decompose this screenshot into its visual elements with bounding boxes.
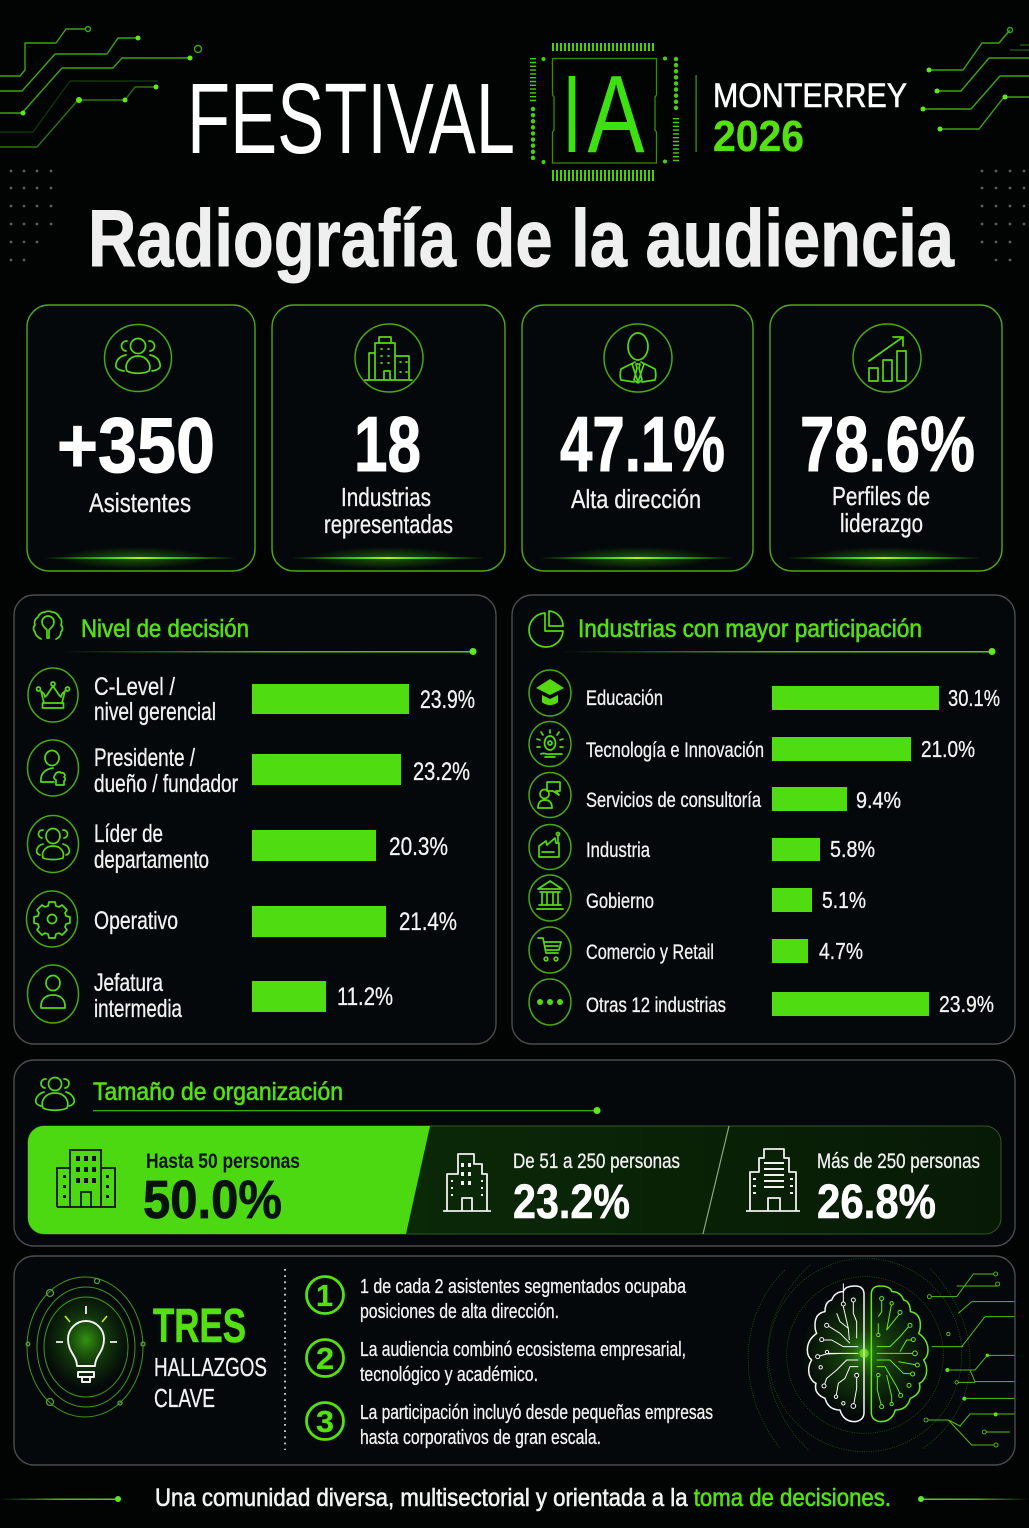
dot grid right — [981, 170, 1025, 261]
label: Perfiles de liderazgo: Perfiles de — [832, 481, 930, 511]
row: Tecnología e Innovación: Tecnología e Innovación — [586, 739, 764, 762]
footer statement: Una comunidad diversa, multisectorial y orientada a la toma de decisiones. — [155, 1484, 891, 1512]
row: Tecnología e Innovación: 21.0% — [921, 736, 975, 762]
row: Educación — [529, 670, 1000, 716]
finding 1: posiciones de alta dirección. — [360, 1301, 559, 1323]
row: C-Level — [28, 668, 475, 726]
icon: people — [104, 324, 172, 392]
stat: 47.1%: 47.1% — [560, 400, 725, 488]
row: Comercio y Retail: Comercio y Retail — [586, 941, 714, 964]
segment: de 51 a 250 personas: 23.2% — [513, 1176, 630, 1229]
heading: HALLAZGOS CLAVE — [154, 1352, 267, 1413]
icon: glowing bulb — [26, 1277, 145, 1417]
row: Comercio y Retail — [529, 927, 863, 973]
stat: 78.6%: 78.6% — [800, 400, 975, 488]
panel: liderazgo — [770, 305, 1002, 571]
stat: +350: +350 — [57, 401, 215, 489]
heading: Industrias con mayor participación: Industrias con mayor participación — [578, 615, 922, 643]
label: Asistentes: Asistentes — [89, 488, 191, 518]
row: Jefatura intermedia: intermedia — [94, 995, 182, 1023]
logo: FESTIVAL wordmark: FESTIVAL — [187, 63, 515, 175]
icon: pie chart — [529, 611, 563, 647]
finding 2: 2 — [316, 1341, 334, 1376]
icon: team — [36, 1078, 74, 1110]
finding 2: tecnológico y académico. — [360, 1364, 538, 1386]
row: Jefatura intermedia: 11.2% — [337, 983, 393, 1011]
panel: tamaño de organización — [14, 1060, 1015, 1246]
row: Otras 12 industrias: 23.9% — [939, 991, 994, 1017]
row: Presidente: 23.2% — [413, 758, 470, 786]
row: Presidente — [28, 740, 470, 798]
row: Gobierno — [529, 875, 866, 921]
row: Servicios de consultoría — [529, 772, 901, 818]
segment: de 51 a 250 personas: De 51 a 250 personas — [513, 1150, 680, 1173]
panel: alta dirección — [522, 305, 753, 571]
logo: IA chip: I — [562, 53, 582, 176]
footer: decorative line right — [918, 1496, 1029, 1502]
row: Jefatura intermedia — [28, 965, 393, 1023]
row: Otras 12 industrias: Otras 12 industrias — [586, 994, 726, 1017]
dotted separator — [284, 1269, 286, 1450]
heading: Nivel de decisión: Nivel de decisión — [81, 615, 249, 643]
panel: asistentes — [27, 305, 255, 571]
finding 2: La audiencia combinó ecosistema empresarial, — [360, 1339, 686, 1361]
row: Presidente: Presidente / — [94, 744, 195, 772]
row: Líder de departamento: 20.3% — [389, 833, 448, 861]
icon: gear bulb — [34, 611, 62, 639]
row: Otras 12 industrias — [529, 979, 994, 1025]
footer: decorative line left — [0, 1496, 121, 1502]
label: Perfiles de liderazgo: liderazgo — [840, 508, 923, 538]
icon: buildings — [355, 324, 423, 392]
finding 1: 1 de cada 2 asistentes segmentados ocupaba — [360, 1276, 687, 1298]
finding 3: 3 — [316, 1404, 334, 1439]
heading: Tamaño de organización: Tamaño de organización — [93, 1078, 343, 1106]
segment: hasta 50 personas: Hasta 50 personas — [146, 1150, 300, 1173]
stat: 18: 18 — [354, 400, 421, 488]
logo: IA chip — [533, 47, 676, 176]
row: Comercio y Retail: 4.7% — [819, 938, 863, 964]
row: Gobierno: 5.1% — [822, 887, 866, 913]
label: Industrias representadas: representadas — [324, 509, 453, 539]
row: Líder de departamento: Líder de — [94, 820, 163, 848]
divider between segments — [703, 1126, 729, 1234]
heading rule — [560, 648, 996, 655]
segmented bar background — [28, 1126, 1001, 1234]
segment: más de 250 personas: Más de 250 personas — [817, 1150, 980, 1173]
circuit decoration: top left — [0, 26, 202, 147]
label: Industrias representadas: Industrias — [341, 482, 431, 512]
row: C-Level: C-Level / — [94, 673, 175, 701]
segment: de 51 a 250 personas — [443, 1150, 680, 1229]
circuit decoration: top right — [920, 28, 1029, 132]
row: Servicios de consultoría: 9.4% — [856, 787, 901, 813]
panel: tres hallazgos clave — [14, 1256, 1015, 1465]
icon: growth chart — [853, 324, 921, 392]
logo: IA chip: A — [588, 53, 645, 176]
icon: executive — [604, 324, 672, 392]
logo: MONTERREY: MONTERREY — [713, 77, 907, 115]
finding 1 — [306, 1276, 687, 1323]
heading rule — [93, 1107, 600, 1114]
row: Industria: 5.8% — [830, 836, 875, 862]
logo divider — [696, 75, 697, 152]
heading: HALLAZGOS CLAVE: HALLAZGOS — [154, 1352, 267, 1382]
row: Tecnología e Innovación — [529, 722, 975, 766]
heading rule — [60, 648, 476, 655]
label: Perfiles de liderazgo — [832, 481, 930, 538]
row: Servicios de consultoría: Servicios de consultoría — [586, 789, 761, 812]
row: Líder de departamento — [28, 816, 448, 874]
finding 2 — [306, 1339, 686, 1386]
row: Líder de departamento: departamento — [94, 846, 209, 874]
row: Operativo: Operativo — [94, 907, 178, 935]
segment: más de 250 personas: 26.8% — [817, 1176, 936, 1229]
label: Industrias representadas — [324, 482, 453, 539]
illustration: circuit brain — [748, 1258, 1014, 1452]
segment: hasta 50 personas — [28, 1126, 430, 1234]
segment: más de 250 personas — [746, 1149, 980, 1229]
row: C-Level: 23.9% — [420, 686, 475, 714]
heading: HALLAZGOS CLAVE: CLAVE — [154, 1383, 215, 1413]
row: C-Level: nivel gerencial — [94, 698, 216, 726]
label: Alta dirección: Alta dirección — [571, 484, 701, 514]
finding 3 — [306, 1402, 713, 1449]
panel: industrias con mayor participación — [512, 595, 1015, 1044]
row: Presidente: dueño / fundador — [94, 770, 238, 798]
panel: industrias — [272, 305, 505, 571]
logo: 2026: 2026 — [713, 112, 804, 161]
finding 3: La participación incluyó desde pequeñas empresas — [360, 1402, 713, 1424]
row: Industria: Industria — [586, 839, 650, 862]
panel: nivel de decisión — [14, 595, 496, 1044]
finding 3: hasta corporativos de gran escala. — [360, 1427, 601, 1449]
segment: hasta 50 personas: 50.0% — [143, 1170, 282, 1230]
heading: TRES: TRES — [153, 1300, 246, 1353]
row: Educación: Educación — [586, 687, 663, 710]
row: Educación: 30.1% — [948, 685, 1000, 711]
dot grid left — [10, 170, 52, 261]
row: Industria — [529, 824, 875, 870]
finding 1: 1 — [316, 1278, 333, 1313]
row: Operativo — [26, 891, 457, 947]
row: Jefatura intermedia: Jefatura — [94, 969, 163, 997]
row: Gobierno: Gobierno — [586, 890, 654, 913]
row: Operativo: 21.4% — [399, 908, 457, 936]
